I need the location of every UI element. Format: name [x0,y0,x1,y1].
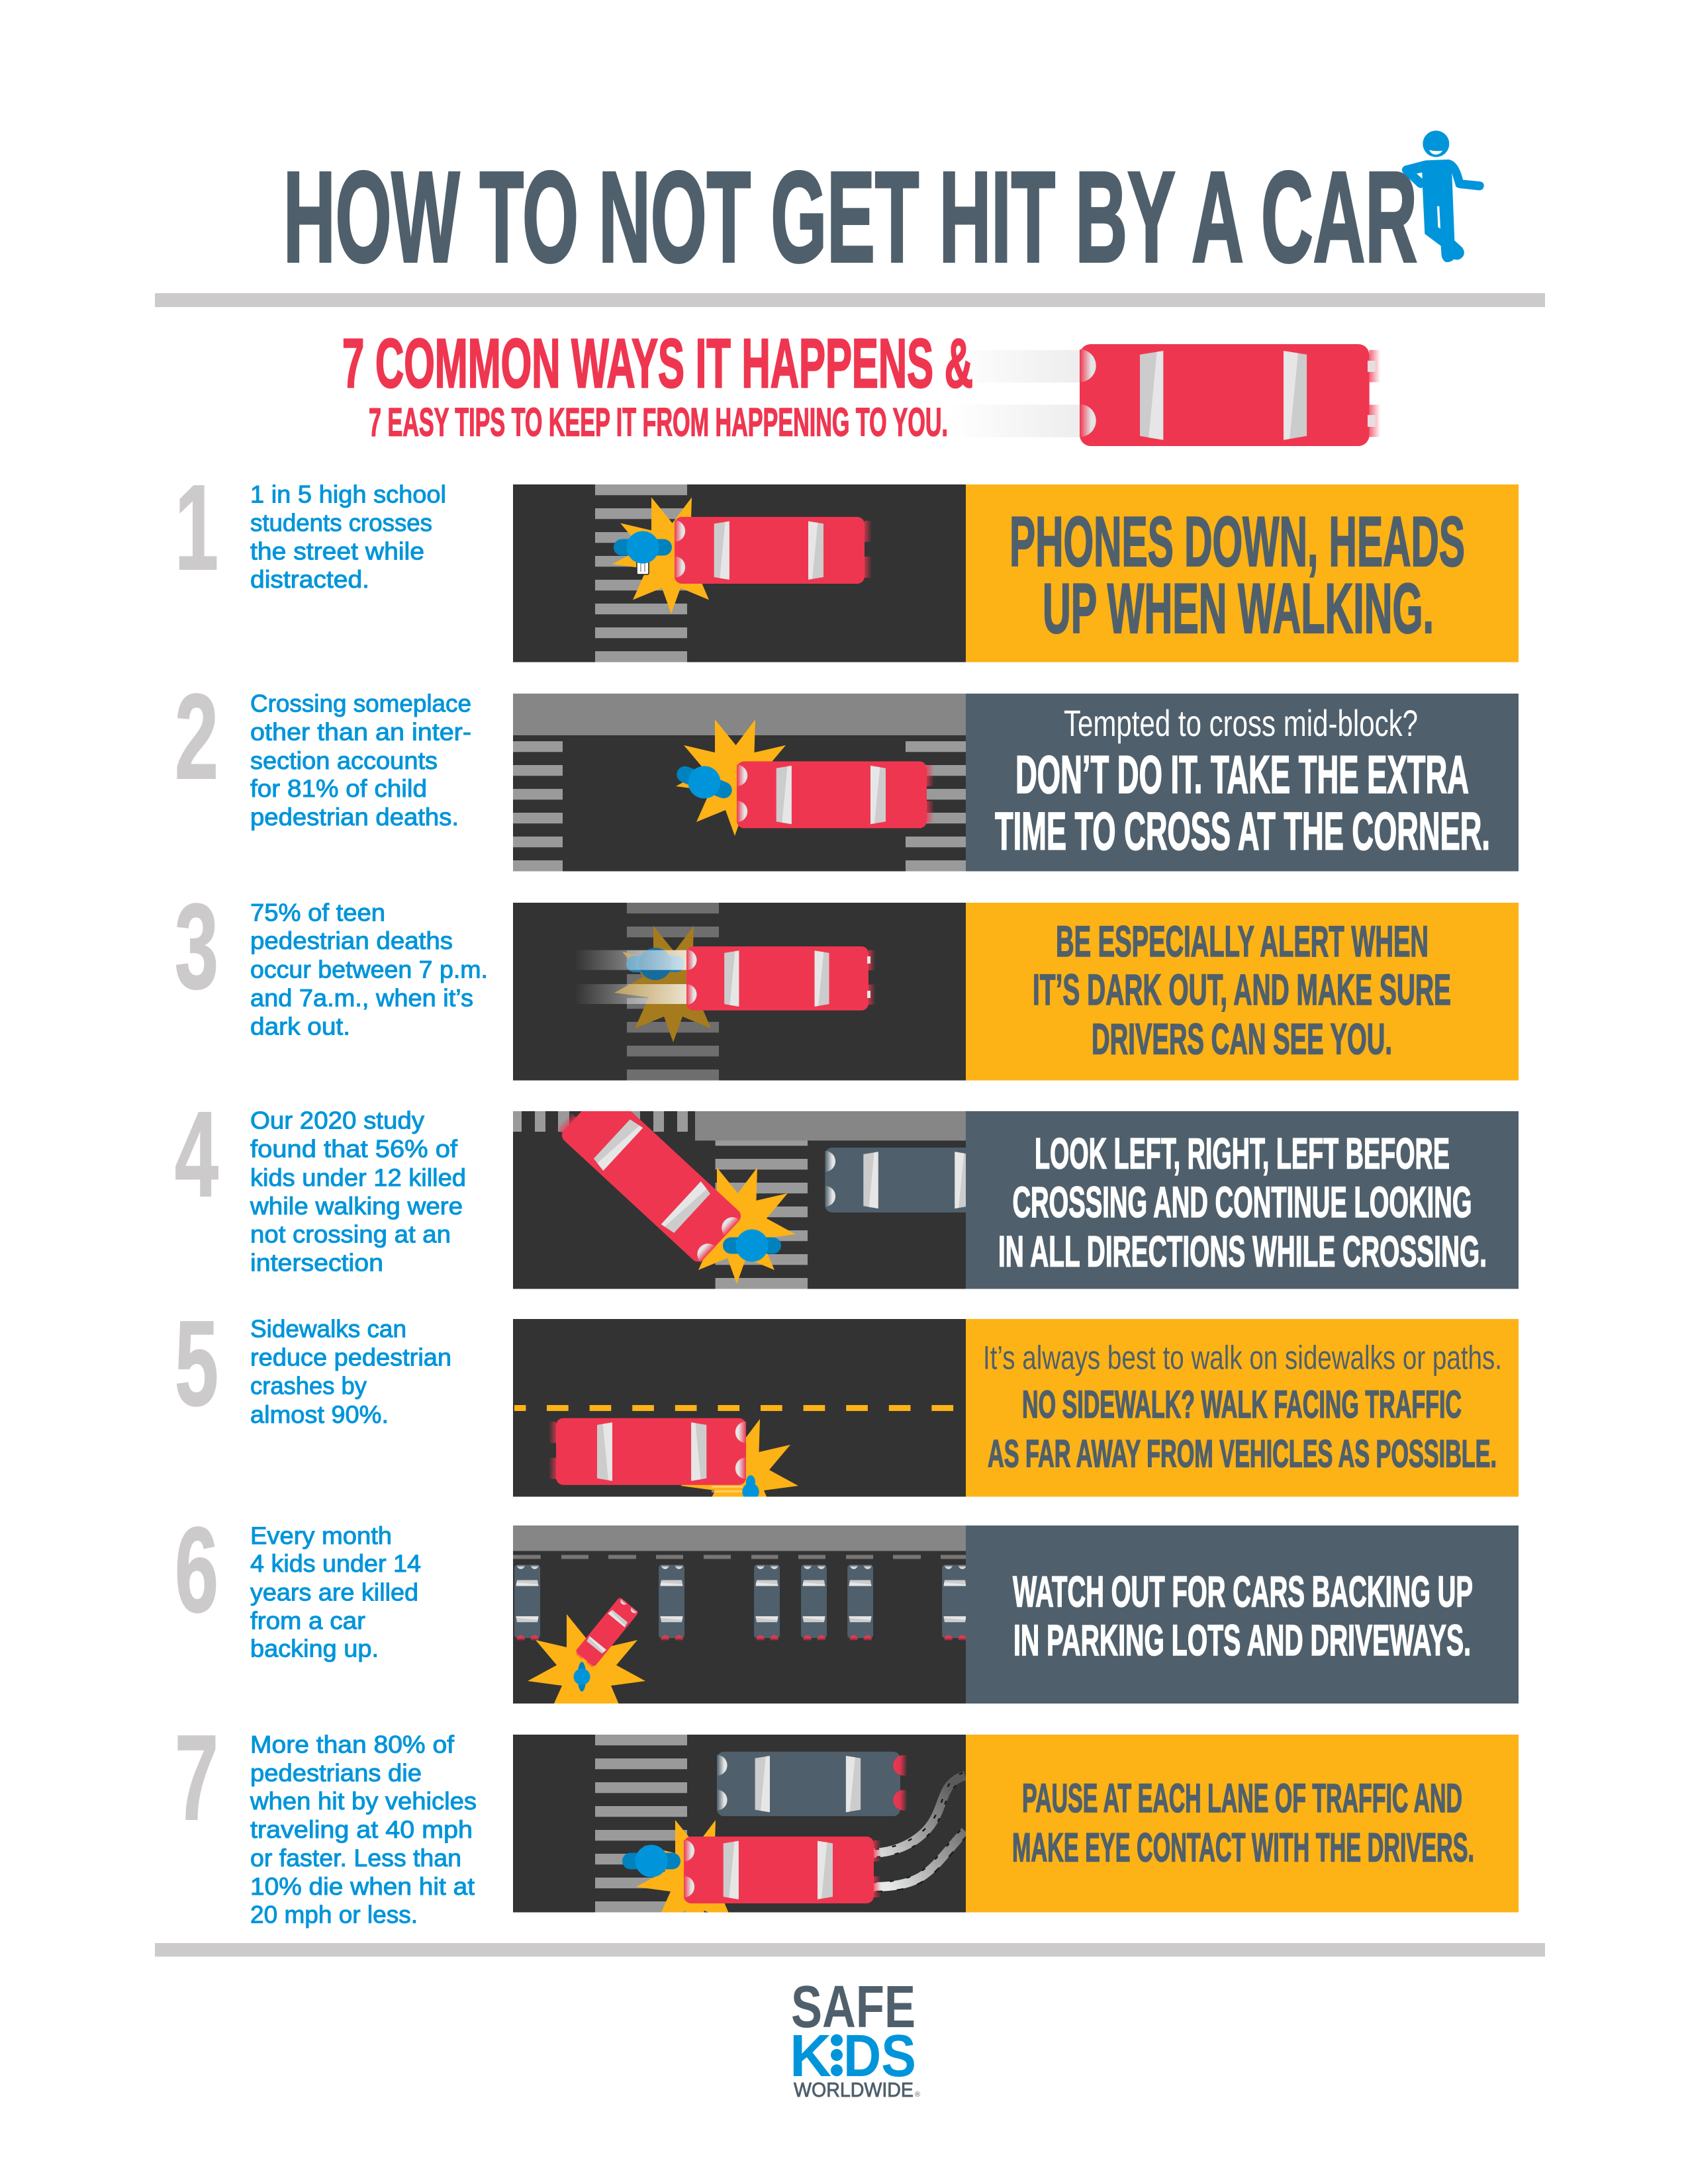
row 5 stat text: reduce pedestrian [250,1344,451,1371]
top crosswalk stripes [513,1111,688,1132]
row 2 stat text [250,690,471,831]
tip 3 panel [966,903,1519,1080]
red car [737,761,934,828]
row 1 stat text: the street while [250,537,424,565]
row 5 number: 5 [175,1295,218,1431]
sidewalk [695,1111,966,1140]
row 3 stat text: pedestrian deaths [250,927,453,954]
collision burst [612,498,709,614]
pedestrian [723,1230,781,1261]
row 7 stat text: pedestrians die [250,1759,422,1787]
row 4 stat text: while walking were [250,1193,463,1220]
row 5 stat text: crashes by [250,1372,367,1399]
row 4 stat text [250,1107,466,1276]
crosswalk [716,1135,808,1289]
tip 5 panel [966,1319,1519,1497]
tip 1 panel [966,484,1519,662]
crosswalk [595,484,687,662]
row 6 stat text: years are killed [250,1579,418,1606]
collision burst [680,1419,798,1535]
row 6 stat text: from a car [250,1607,365,1634]
pedestrian [626,948,684,980]
tip 6 panel [966,1525,1519,1704]
tip 2 panel [966,694,1519,871]
top divider bar [155,293,1545,307]
row 7 stat text: traveling at 40 mph [250,1816,473,1843]
row 6 stat text: 4 kids under 14 [250,1550,421,1577]
row 7 stat text: or faster. Less than [250,1844,461,1872]
row 3 stat text: occur between 7 p.m. [250,956,488,983]
phone [637,561,649,574]
logo: Safe Kids Worldwide: DS [843,2023,916,2089]
row 4 stat text: not crossing at an [250,1221,451,1248]
red car [549,1418,746,1485]
row 7 stat text: More than 80% of [250,1731,455,1758]
row 5 stat text: almost 90%. [250,1401,389,1428]
panel 7 scene: multi-lane crossing [513,1735,968,1936]
crosswalk [595,1735,687,1913]
row 2 stat text: other than an inter- [250,719,471,746]
collision burst [528,1614,645,1731]
row 3 number: 3 [175,878,218,1014]
pedestrian side view [573,1662,590,1692]
panel 1 scene: distracted pedestrian at crosswalk [513,484,966,662]
bottom divider bar [155,1943,1545,1956]
collision burst [614,926,711,1042]
collision burst [636,1820,754,1936]
row 1 stat text: students crosses [250,509,432,536]
headlight beams [581,950,686,1004]
row 2 number: 2 [175,668,218,804]
row 7 number: 7 [175,1709,218,1845]
row 6 stat text: backing up. [250,1635,379,1662]
red car [684,1837,881,1903]
icon: speeding red car [949,344,1380,446]
tip 3 panel: BE ESPECIALLY ALERT WHEN [1056,917,1429,966]
row 7 stat text: when hit by vehicles [250,1788,477,1815]
tip 7 panel [966,1735,1519,1913]
logo: Safe Kids Worldwide: WORLDWIDE [794,2078,914,2101]
row 3 stat text [250,899,488,1040]
logo: Safe Kids Worldwide: SAFE [791,1974,915,2040]
pedestrian [622,1845,680,1877]
sidewalk [513,694,966,735]
row 3 stat text: 75% of teen [250,899,385,926]
parked cars [514,1565,968,1641]
dashed centre line [514,1405,953,1411]
panel 6 scene: parking lot [513,1525,968,1731]
skid marks [872,1772,968,1891]
row 6 stat text [250,1522,421,1662]
row 4 stat text: kids under 12 killed [250,1164,466,1191]
row 7 stat text: 20 mph or less. [250,1901,418,1928]
subtitle: 7 COMMON WAYS IT HAPPENS & [342,325,973,402]
logo: Safe Kids Worldwide: K [790,2023,831,2089]
row 6 number: 6 [175,1502,218,1637]
parking dashes [513,1555,966,1559]
row 5 stat text [250,1316,451,1428]
grey car [825,1148,1016,1212]
pedestrian side view [712,1475,759,1500]
row 4 stat text: Our 2020 study [250,1107,425,1134]
logo: Safe Kids Worldwide [790,1974,920,2101]
tip 4 panel [966,1111,1519,1289]
sidewalk [513,1525,966,1551]
row 2 stat text: section accounts [250,747,438,774]
red backing car [573,1597,639,1669]
row 2 stat text: Crossing someplace [250,690,471,717]
collision burst [676,719,794,836]
row 3 stat text: and 7a.m., when it’s [250,985,473,1012]
red turning car [553,1081,744,1265]
row 1 stat text: distracted. [250,566,369,593]
crosswalk edges [513,741,966,871]
panel 2 scene: mid-block crossing [513,694,966,871]
pedestrian [614,531,672,564]
row 7 stat text [250,1731,477,1928]
row 2 stat text: pedestrian deaths. [250,803,459,831]
red car [675,517,872,584]
row 6 stat text: Every month [250,1522,392,1549]
tip 3 panel: DRIVERS CAN SEE YOU. [1092,1015,1392,1064]
collision burst [678,1167,796,1284]
pedestrian [677,766,732,798]
row 7 stat text: 10% die when hit at [250,1873,475,1900]
red car [686,946,875,1011]
row 2 stat text: for 81% of child [250,775,427,802]
row 4 number: 4 [175,1086,218,1222]
panel 4 scene: turning car at intersection [513,1081,1016,1289]
row 4 stat text: found that 56% of [250,1136,458,1163]
panel 5 scene: walking along the road [513,1319,966,1535]
crosswalk [627,903,719,1080]
icon: leaning kid figure [1402,130,1484,262]
row 3 stat text: dark out. [250,1013,350,1040]
row 1 number: 1 [175,459,218,595]
tip 5 panel: It’s always best to walk on sidewalks or paths. [983,1339,1502,1376]
row 4 stat text: intersection [250,1249,383,1276]
row 1 stat text: 1 in 5 high school [250,480,446,508]
tip 2 panel: Tempted to cross mid-block? [1064,702,1418,744]
subtitle [342,325,973,445]
row 1 stat text [250,480,446,593]
row 5 stat text: Sidewalks can [250,1316,406,1342]
subtitle: 7 EASY TIPS TO KEEP IT FROM HAPPENING TO YOU. [369,400,948,445]
grey car [717,1752,908,1816]
logo: Safe Kids Worldwide: ® [915,2091,920,2099]
panel 3 scene: crash in the dark [513,903,966,1080]
